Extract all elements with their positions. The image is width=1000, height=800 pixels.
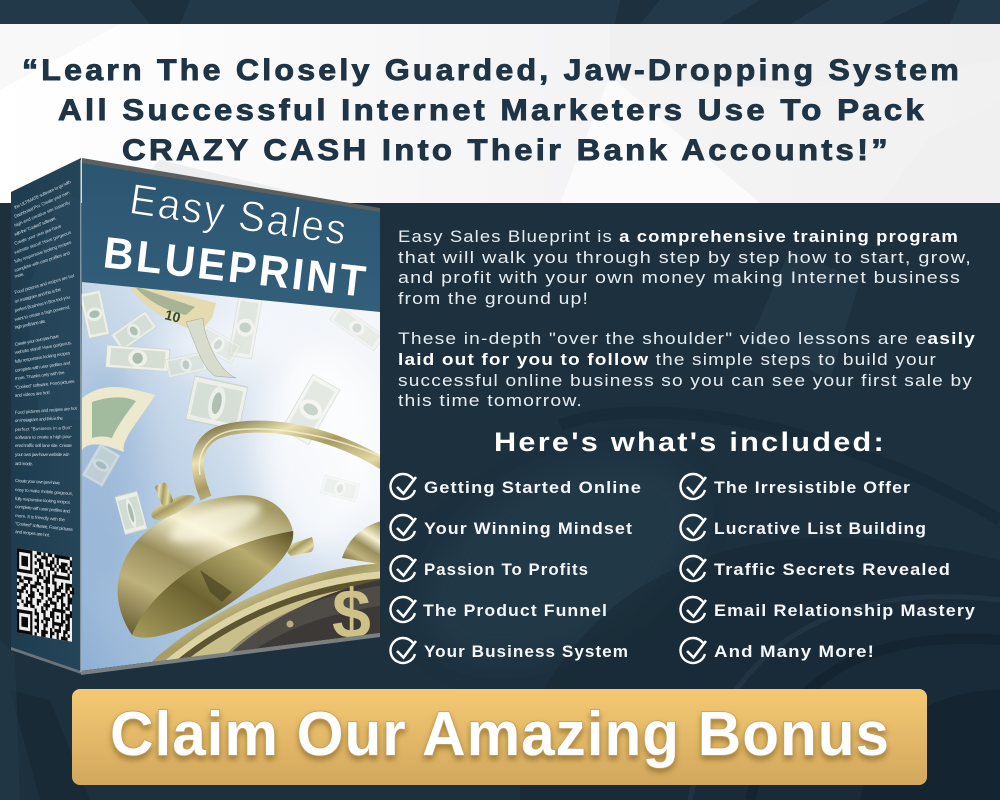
intro paragraph: that will walk you through step by step how to start, grow, <box>398 249 972 267</box>
box header <box>80 158 380 675</box>
item: Your Business System <box>390 638 629 663</box>
second paragraph <box>398 330 976 410</box>
headline: CRAZY CASH Into Their Bank Accounts!” <box>122 134 891 167</box>
side panel text: the ULTIMATE software to go with <box>13 179 72 210</box>
side panel text: fully responsive looking recipes <box>14 239 73 264</box>
side panel text <box>13 179 78 538</box>
side panel text: "Cooked" software. Food pictures <box>15 379 75 390</box>
second paragraph: These in-depth "over the shoulder" video lessons are e asily <box>398 330 976 348</box>
side panel text: Create your own jaw-have <box>14 333 60 347</box>
side panel text: fully responsive looking recipes <box>14 350 71 364</box>
side panel text: Food pictures and recipes are hot <box>15 406 78 415</box>
item: Lucrative List Building <box>681 515 927 540</box>
side panel text: easy to make mobile gorgeous, <box>15 487 73 496</box>
dial: $ <box>332 575 371 653</box>
call to action button: Claim Our Amazing Bonus <box>110 700 890 769</box>
item: Getting Started Online <box>391 474 642 499</box>
item: Email Relationship Mastery <box>680 597 976 622</box>
item: Getting Started Online: Getting Started Online <box>424 479 642 497</box>
side panel text: more. It is friendly with the <box>15 513 66 522</box>
dial <box>151 564 380 662</box>
intro paragraph: Easy Sales Blueprint is a comprehensive training program <box>398 228 959 246</box>
alarm clock <box>118 427 390 680</box>
item: Your Winning Mindset <box>391 515 633 540</box>
side panel text: with the "Cooked" software. <box>14 215 57 237</box>
item: Lucrative List Building: Lucrative List Building <box>714 520 927 538</box>
item: The Irresistible Offer: The Irresistible Offer <box>714 479 911 497</box>
side panel text: on Instagram and this is the <box>14 287 62 304</box>
bell dome <box>118 495 293 635</box>
bell knob <box>151 495 195 520</box>
side panel text: high profit lane site. <box>14 318 47 330</box>
flying dollar bills: 10 <box>163 306 182 326</box>
side panel text: complete with user profiles and <box>15 504 71 514</box>
bell handle <box>198 427 385 498</box>
side panel text: high-end creative site instantly <box>13 200 71 228</box>
side panel text: software to create a high pow- <box>15 434 72 440</box>
side panel text: website stand! Have gorgeous, <box>14 340 72 355</box>
item: Email Relationship Mastery: Email Relationship Mastery <box>714 602 976 620</box>
side panel text: want to create a high powered, <box>14 304 71 322</box>
side panel text: perfect "Business in a Box" <box>15 425 72 432</box>
side panel text: your own jaw-have website wiz- <box>15 452 70 457</box>
intro paragraph: and profit with your own money making Internet business <box>398 269 961 287</box>
box subtitle: BLUEPRINT <box>101 228 371 307</box>
side panel text: ard mode. <box>15 461 33 466</box>
box title: Easy Sales <box>127 175 351 255</box>
side panel text: and videos are hot! <box>15 390 50 398</box>
side panel text: "Cooked" software. Food pictures <box>15 521 74 532</box>
side panel text: Create your own jaw-have <box>14 223 62 246</box>
side panel text: complete with user profiles and <box>14 250 71 273</box>
item: And Many More! <box>680 638 875 663</box>
side panel text: Food pictures and recipes are hot <box>14 273 76 295</box>
second paragraph: this time tomorrow. <box>398 392 583 410</box>
checklist right column <box>680 474 976 663</box>
headline: “Learn The Closely Guarded, Jaw-Dropping System <box>22 54 962 87</box>
call to action button <box>72 689 927 785</box>
item: Passion To Profits: Passion To Profits <box>424 561 589 579</box>
checklist left column <box>390 474 642 663</box>
side panel text: Create your own jaw-have <box>15 478 61 485</box>
side panel text: more. <box>14 271 25 279</box>
intro paragraph <box>398 228 972 308</box>
flying dollar bills <box>80 281 384 535</box>
item: The Product Funnel <box>391 597 608 622</box>
item: And Many More!: And Many More! <box>714 643 875 661</box>
intro paragraph: from the ground up! <box>398 290 589 308</box>
item: Passion To Profits <box>391 556 589 581</box>
side panel text: fully responsive looking recipes <box>15 496 71 505</box>
side panel text: more. Thanks only with the <box>15 370 65 381</box>
second paragraph: laid out for you to follow the simple steps to build your <box>398 351 937 369</box>
second paragraph: successful online business so you can see your first sale by <box>398 372 973 390</box>
second bell <box>342 521 380 564</box>
item: The Product Funnel: The Product Funnel <box>423 602 608 620</box>
item: The Irresistible Offer <box>681 474 911 499</box>
side panel text: ered traffic sell lane site. Create <box>15 443 72 448</box>
item: Your Business System: Your Business System <box>424 643 629 661</box>
headline <box>22 54 962 167</box>
item: Traffic Secrets Revealed <box>681 556 951 581</box>
connector knob <box>287 537 314 556</box>
item: Your Winning Mindset: Your Winning Mindset <box>424 520 633 538</box>
section heading: Here's what's included: <box>494 427 886 457</box>
side panel text: and recipes are hot. <box>15 529 50 538</box>
side panel text: Dashboard Pro. Create your own <box>13 190 71 219</box>
box front image <box>81 216 380 671</box>
box side panel <box>11 158 81 674</box>
side panel text: complete with user profiles and <box>14 360 71 373</box>
side panel text: website stand! Have gorgeous <box>14 229 72 255</box>
side panel text: perfect Business in Box tool you <box>14 294 71 313</box>
side panel text: on Instagram and this is the <box>15 415 63 423</box>
QR code <box>17 548 74 642</box>
headline: All Successful Internet Marketers Use To Pack <box>58 94 927 127</box>
top white banner <box>0 24 1000 203</box>
bell inner <box>132 531 293 638</box>
product box <box>11 158 390 680</box>
item: Traffic Secrets Revealed: Traffic Secrets Revealed <box>714 561 951 579</box>
